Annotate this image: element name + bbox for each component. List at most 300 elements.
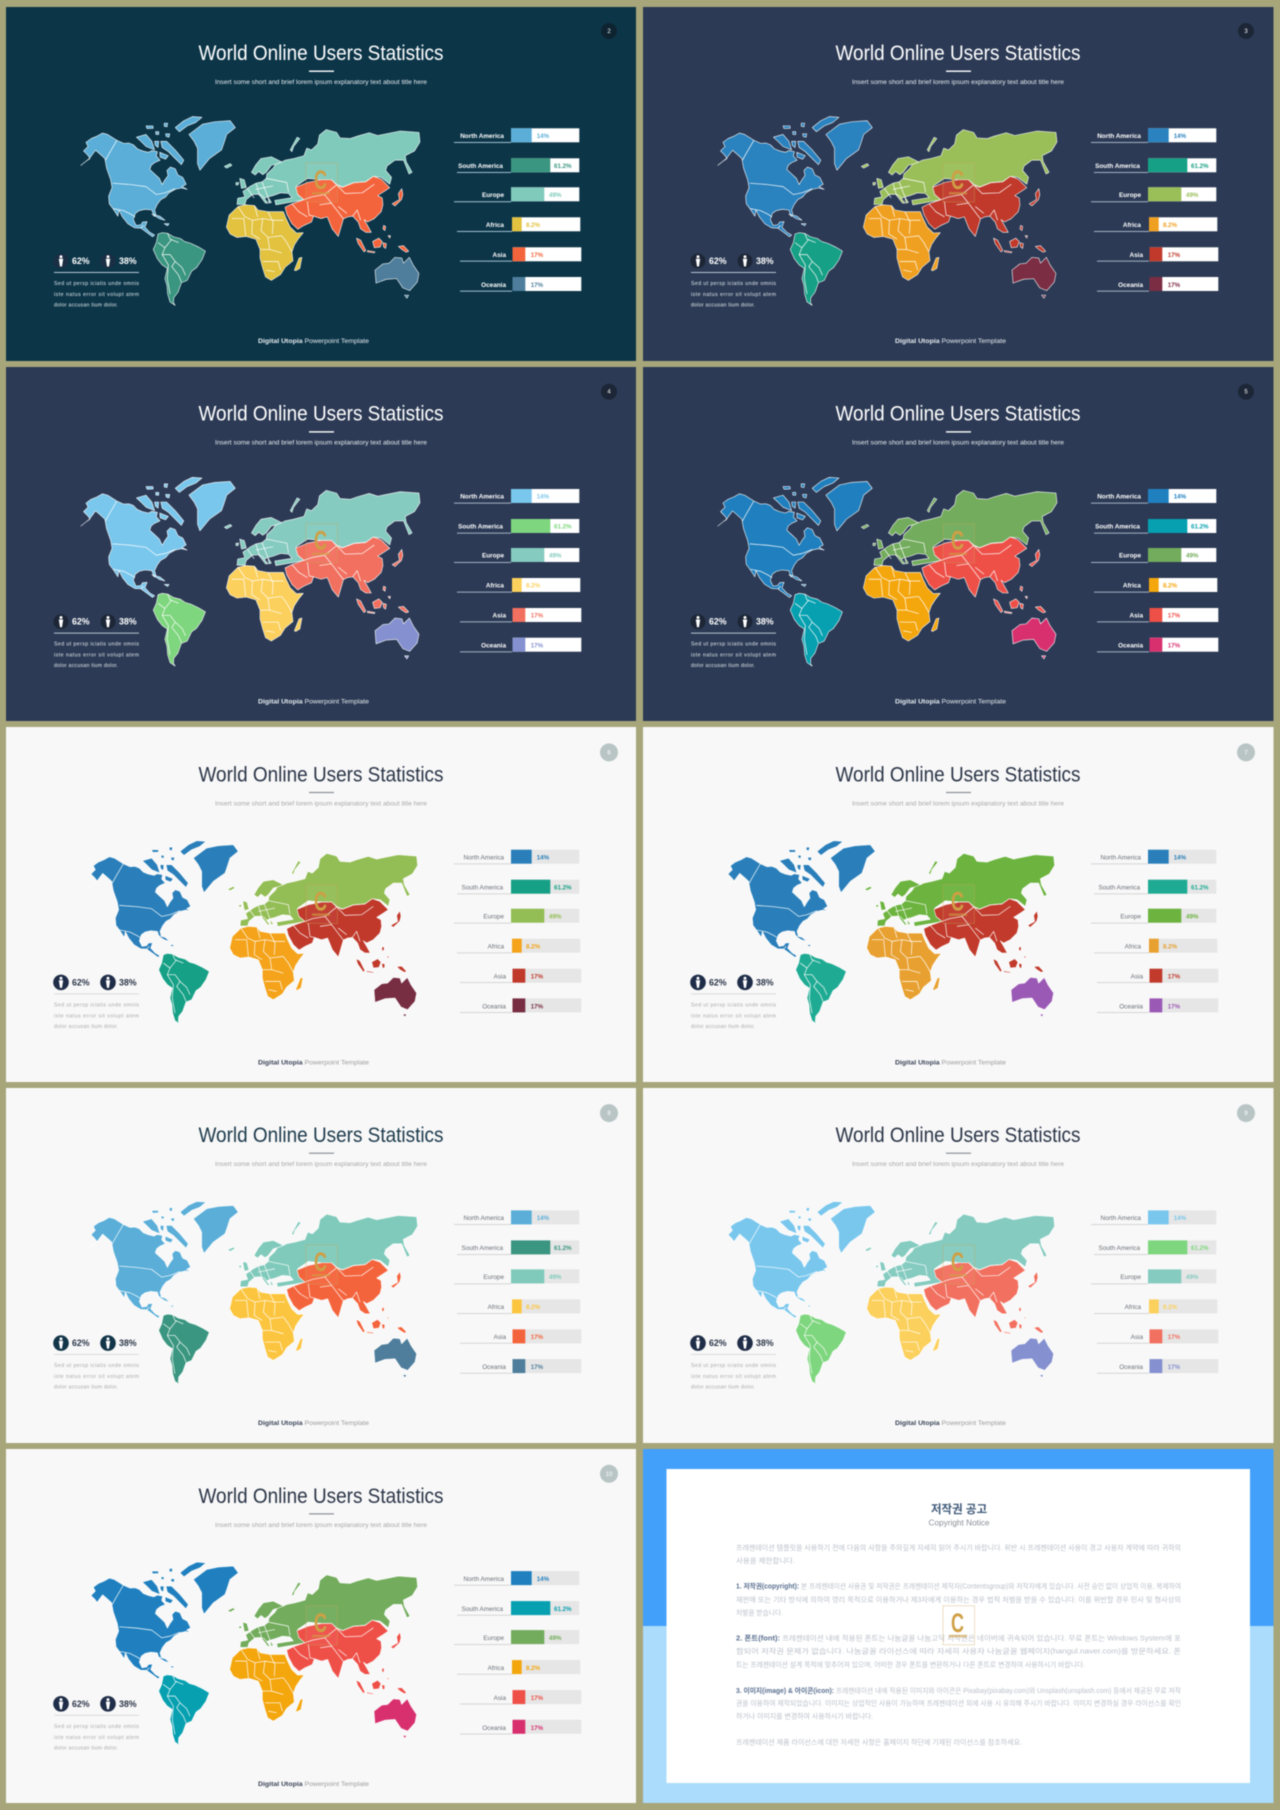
stats description: dolor accusan tium dolor. [691,663,755,669]
notice subheading: Copyright Notice [928,1518,990,1528]
notice intro [736,1543,1181,1565]
bar: North America: North America [464,1576,504,1583]
bar: Asia [460,247,581,262]
page number: 9 [1244,1111,1248,1117]
bar: Asia: Asia [494,1695,506,1702]
stats description: Sed ut persp iciatis unde omnis [54,642,139,648]
bar: Oceania [1097,277,1218,292]
bar: Asia: Asia [492,613,506,620]
gender stats: 62% [709,256,727,266]
bar: Oceania [1097,638,1218,652]
bar: Europe [454,909,579,924]
bar: Asia [460,1690,581,1704]
bar: North America: North America [1100,1215,1141,1222]
bar: South America [457,1601,579,1616]
bar: Europe: Europe [483,1274,504,1281]
bar: South America: South America [458,163,503,170]
bar: South America: South America [1095,163,1140,170]
world map [88,1201,418,1385]
bar: Asia: Asia [494,973,506,980]
title: World Online Users Statistics [198,763,444,786]
bar: Africa: Africa [486,583,504,590]
bar: Asia: Asia [1130,252,1143,259]
world map [81,117,420,305]
stats description: iste natus error sit volupt atem [691,653,776,659]
stats description: Sed ut persp iciatis unde omnis [691,1363,776,1369]
bar: Asia: Asia [494,1334,506,1341]
bar: Africa: 8.2% [526,1665,541,1672]
bar: South America: 61.2% [1191,163,1209,170]
notice section 1 [736,1582,1181,1617]
bar: North America [1091,1210,1216,1225]
world map [718,477,1057,666]
bar: North America [1091,489,1216,504]
title underline [946,70,971,72]
bar: Asia: Asia [492,252,506,259]
title: World Online Users Statistics [198,403,444,426]
bar: South America [1094,880,1216,894]
gender stats: 38% [756,977,774,987]
footer: Digital Utopia Powerpoint Template [895,1420,1006,1427]
gender stats: 38% [119,977,137,987]
bar: Africa: Africa [488,1665,504,1672]
bar: Europe: 49% [1186,553,1199,560]
stats description: dolor accusan tium dolor. [691,1024,755,1030]
notice heading: 저작권 공고 [931,1502,987,1516]
bar: Asia: 17% [1168,613,1181,620]
bar: North America: 14% [1174,494,1187,501]
page number: 10 [606,1472,613,1478]
stats description: iste natus error sit volupt atem [691,1374,776,1380]
notice section 3: 3. 이미지(image) & 아이콘(icon): 프레젠테이션 내에 적용된 이미지와 아이콘은 Pixabay(pixabay.com)와 Unsplash(unsplash.com) 등에서 제공된 무료 저작 [736,1686,1182,1695]
stats description: Sed ut persp iciatis unde omnis [54,1363,139,1369]
stats description: dolor accusan tium dolor. [691,302,755,308]
bar: Oceania: 17% [531,643,544,650]
footer: Digital Utopia Powerpoint Template [258,1420,369,1427]
bar: South America [1094,519,1216,534]
bar: Asia [1097,608,1218,622]
panel: slide 7 [643,727,1274,1082]
subtitle: Insert some short and brief lorem ipsum explanatory text about title here [215,1522,427,1529]
gender stats [54,614,137,629]
bar: Oceania: Oceania [482,1725,506,1732]
footer: Digital Utopia Powerpoint Template [258,1781,369,1788]
subtitle: Insert some short and brief lorem ipsum explanatory text about title here [852,800,1064,807]
page number [601,384,617,400]
title underline [309,1513,334,1514]
bar: North America [454,1571,579,1586]
gender stats: 38% [756,256,774,266]
bar: Europe: 49% [1186,192,1199,199]
bar: Oceania: 17% [531,282,544,289]
bar: Europe: Europe [1120,913,1141,920]
world map [725,841,1055,1024]
subtitle: Insert some short and brief lorem ipsum explanatory text about title here [852,1161,1064,1168]
bar: Asia: Asia [1131,973,1143,980]
bar: Oceania: Oceania [482,1003,506,1010]
bar: Europe: Europe [482,192,504,199]
notice closing: 프레젠테이션 제품 라이선스에 대한 자세한 사항은 홈페이지 하단에 기재된 라이선스를 참조하세요. [736,1738,1022,1747]
bar: Africa: 8.2% [526,943,541,950]
stats description [54,281,139,308]
bar: Africa [457,578,580,593]
bar: Africa: Africa [488,943,504,950]
stats divider [54,632,139,635]
bar: North America [1091,128,1216,143]
notice section 1: 처벌을 받습니다. [736,1608,783,1617]
bar: Africa: 8.2% [526,583,541,590]
stats divider [691,1353,776,1356]
watermark [943,163,974,202]
page number: 3 [1244,29,1248,35]
bar: Europe [454,548,579,563]
title underline [309,792,334,793]
bar: Africa: 8.2% [1163,1304,1178,1311]
bar: Oceania [460,998,581,1013]
watermark [943,524,974,563]
panel: slide 3 [643,7,1274,361]
stats divider [54,1714,139,1717]
gender stats: 38% [119,617,137,627]
title: World Online Users Statistics [198,42,444,65]
title underline [309,70,334,72]
stats divider [691,271,776,274]
bar: Oceania: Oceania [1118,643,1143,650]
gender stats: 38% [119,1338,137,1348]
footer: Digital Utopia Powerpoint Template [895,338,1006,345]
notice section 2: 2. 폰트(font): 프레젠테이션 내에 적용된 폰트는 나눔글꼴 나눔고딕 저작권은 네이버에 귀속되어 있습니다. 무료 폰트는 Windows System에 포 [736,1634,1182,1643]
world map [88,841,418,1024]
bar: North America [454,850,579,864]
title underline [309,431,334,433]
bar: Oceania: 17% [1168,1003,1181,1010]
stats divider [54,992,139,995]
page number: 8 [607,1111,611,1117]
title underline [309,1153,334,1154]
bar: Oceania: Oceania [1119,1003,1143,1010]
bar: South America: South America [461,1606,503,1613]
bar: Europe [1091,909,1216,924]
title: World Online Users Statistics [836,763,1080,786]
bar: North America: 14% [1174,1215,1187,1222]
bar: North America [454,489,579,504]
bar: Asia [1097,247,1218,262]
bar: Asia: Asia [1131,1334,1143,1341]
page number: 7 [1244,750,1248,756]
bar: Europe: 49% [549,1274,562,1281]
bar: South America: 61.2% [554,1245,572,1252]
bar: South America: 61.2% [1191,1245,1209,1252]
gender stats [690,975,774,990]
gender stats: 62% [72,1338,90,1348]
bar: Europe: Europe [1120,1274,1141,1281]
bar: South America: 61.2% [554,884,572,891]
bar: North America: North America [1097,133,1141,140]
title: World Online Users Statistics [836,1124,1080,1147]
page number [601,23,617,39]
gender stats [690,1335,774,1351]
bar: Asia: 17% [1168,252,1181,259]
stats description: dolor accusan tium dolor. [54,1024,118,1030]
stats description: Sed ut persp iciatis unde omnis [691,281,776,287]
watermark [943,884,974,923]
subtitle: Insert some short and brief lorem ipsum explanatory text about title here [852,79,1064,86]
bar: Europe: 49% [1186,913,1199,920]
stats description [54,1724,139,1751]
watermark [306,884,338,923]
bar: North America: 14% [537,1215,550,1222]
notice section 3: 하거나 이미지를 변경하여 사용하시기 바랍니다. [736,1712,873,1721]
bar: Africa [457,1660,580,1675]
bar: North America: North America [464,854,504,861]
bar: Oceania [460,277,581,292]
stats description [691,281,776,308]
world map [81,477,420,666]
stats description: iste natus error sit volupt atem [54,1374,139,1380]
bar: South America [457,519,579,534]
bar: Africa: Africa [488,1304,504,1311]
notice section 2 [736,1634,1182,1669]
notice background: upper blue [643,1449,1274,1626]
gender stats: 38% [756,1338,774,1348]
watermark [943,1245,974,1284]
gender stats [53,1335,137,1351]
gender stats [53,1696,137,1712]
bar: South America [457,1240,579,1255]
bar: North America: North America [1100,854,1141,861]
gender stats [690,254,774,268]
gender stats: 38% [756,617,774,627]
bar: South America: South America [461,884,503,891]
bar: Asia: 17% [531,973,544,980]
bar: South America: 61.2% [1191,884,1209,891]
stats description: iste natus error sit volupt atem [54,1013,139,1019]
bar: North America [454,1210,579,1225]
bar: Europe: Europe [1119,553,1141,560]
gender stats [690,614,774,629]
bar: Oceania [1097,1359,1218,1374]
gender stats: 62% [709,1338,727,1348]
bar: North America [1091,850,1216,864]
gender stats: 38% [119,1699,137,1709]
subtitle: Insert some short and brief lorem ipsum explanatory text about title here [215,1161,427,1168]
bar: Africa: 8.2% [526,1304,541,1311]
title: World Online Users Statistics [836,403,1080,426]
title underline [946,431,971,433]
panel: slide 4 [6,367,636,721]
footer: Digital Utopia Powerpoint Template [258,699,369,706]
stats divider [691,632,776,635]
world map [718,117,1057,305]
bar: Africa [1094,578,1217,593]
bar: Europe [454,1630,579,1645]
gender stats: 62% [72,256,90,266]
subtitle: Insert some short and brief lorem ipsum explanatory text about title here [215,800,427,807]
bar: Oceania: Oceania [481,643,506,650]
bar: South America: South America [461,1245,503,1252]
bar: Oceania [1097,998,1218,1013]
footer: Digital Utopia Powerpoint Template [895,1059,1006,1066]
bar: Oceania [460,1720,581,1734]
bar: South America: 61.2% [554,524,572,531]
page number: 4 [607,390,611,396]
bar: North America: North America [460,494,504,501]
bar: Africa: Africa [1125,1304,1141,1311]
panel: slide 8 [6,1088,636,1443]
stats description: dolor accusan tium dolor. [54,302,118,308]
bar: Africa: Africa [1123,583,1141,590]
bar: Asia [460,1329,581,1344]
bar: North America: North America [464,1215,504,1222]
stats description: iste natus error sit volupt atem [54,1735,139,1741]
bar: Europe [1091,548,1216,563]
bar: Oceania: 17% [1168,1364,1181,1371]
title: World Online Users Statistics [198,1485,444,1508]
bar: South America [1094,1240,1216,1255]
stats divider [54,1353,139,1356]
bar: Africa [1094,1299,1217,1314]
bar: South America: South America [1098,1245,1140,1252]
notice card [666,1469,1250,1783]
stats description: Sed ut persp iciatis unde omnis [691,1002,776,1008]
gender stats: 62% [72,977,90,987]
bar: Oceania [460,1359,581,1374]
bar: Europe [1091,187,1216,202]
bar: Asia: 17% [1168,1334,1181,1341]
bar: Europe: 49% [1186,1274,1199,1281]
stats description: Sed ut persp iciatis unde omnis [691,642,776,648]
bar: Asia: 17% [531,252,544,259]
page number [600,743,618,761]
bar: Africa [457,217,580,232]
bar: South America [457,158,579,173]
bar: Europe: 49% [549,553,562,560]
stats description [54,1363,139,1391]
stats description: iste natus error sit volupt atem [54,292,139,298]
page number [1237,1104,1255,1122]
bar: Asia [1097,969,1218,983]
bar: North America: 14% [1174,854,1187,861]
bar: Africa: 8.2% [1163,222,1178,229]
bar: North America: 14% [1174,133,1187,140]
title: World Online Users Statistics [836,42,1080,65]
page number [1237,743,1255,761]
bar: Asia: Asia [1130,613,1143,620]
subtitle: Insert some short and brief lorem ipsum explanatory text about title here [215,440,427,447]
page number [600,1465,618,1483]
bar: Asia [460,608,581,622]
stats description [54,642,139,669]
gender stats: 62% [709,977,727,987]
notice section 1: 재판매 또는 기타 방식에 의하여 영리 목적으로 이용하거나 제3자에게 이용하는 경우 법적 처벌을 받을 수 있습니다. 이를 위반할 경우 민사 및 형사상의 [736,1595,1181,1604]
page number: 2 [607,29,611,35]
title underline [946,792,971,793]
notice section 2: 함되어 저작권 문제가 없습니다. 나눔글꼴 라이선스에 따라 자세히 사용자 나눔글꼴 웹페이지(hangul.naver.com)를 방문하세요. 폰 [736,1647,1182,1656]
bar: South America [1094,158,1216,173]
bar: Europe: 49% [549,913,562,920]
bar: North America: 14% [537,133,550,140]
bar: Oceania: Oceania [482,1364,506,1371]
bar: Europe: 49% [549,1635,562,1642]
subtitle: Insert some short and brief lorem ipsum explanatory text about title here [215,79,427,86]
gender stats: 62% [72,617,90,627]
bar: Oceania [460,638,581,652]
gender stats: 62% [72,1699,90,1709]
bar: South America [457,880,579,894]
panel: slide 5 [643,367,1274,721]
stats description: Sed ut persp iciatis unde omnis [54,1002,139,1008]
bar: Europe: Europe [483,913,504,920]
bar: North America: 14% [537,854,550,861]
panel: slide 10 [6,1449,636,1803]
bar: Oceania: Oceania [481,282,506,289]
stats description: dolor accusan tium dolor. [54,1745,118,1751]
gender stats: 62% [709,617,727,627]
bar: Asia [1097,1329,1218,1344]
bar: Europe [454,187,579,202]
bar: Africa: 8.2% [1163,583,1178,590]
bar: North America [454,128,579,143]
bar: Oceania: Oceania [1118,282,1143,289]
bar: North America: 14% [537,1576,550,1583]
stats description: iste natus error sit volupt atem [54,653,139,659]
bar: Oceania: 17% [531,1364,544,1371]
bar: South America: 61.2% [554,1606,572,1613]
bar: Oceania: 17% [1168,643,1181,650]
notice background: lower light blue [643,1626,1274,1803]
bar: Africa: Africa [1125,943,1141,950]
bar: Africa: 8.2% [526,222,541,229]
bar: Europe: Europe [1119,192,1141,199]
stats description: iste natus error sit volupt atem [691,1013,776,1019]
bar: Oceania: Oceania [1119,1364,1143,1371]
bar: South America: 61.2% [554,163,572,170]
page number [1238,23,1254,39]
bar: Europe: Europe [482,553,504,560]
bar: Europe [454,1269,579,1284]
stats divider [691,992,776,995]
bar: Africa [1094,217,1217,232]
bar: South America: 61.2% [1191,524,1209,531]
stats description: dolor accusan tium dolor. [691,1385,755,1391]
bar: South America: South America [1098,884,1140,891]
stats description: dolor accusan tium dolor. [54,663,118,669]
panel: slide 6 [6,727,636,1082]
gender stats [54,254,137,268]
stats description [691,1363,776,1391]
world map [725,1201,1055,1385]
watermark [306,1606,338,1645]
bar: South America: South America [1095,524,1140,531]
gender stats [53,975,137,990]
stats description [54,1002,139,1030]
title underline [946,1153,971,1154]
panel: slide 9 [643,1088,1274,1443]
footer: Digital Utopia Powerpoint Template [258,1059,369,1066]
stats description: dolor accusan tium dolor. [54,1385,118,1391]
stats description [691,642,776,669]
page number: 6 [607,750,611,756]
title: World Online Users Statistics [198,1124,444,1147]
watermark [943,1606,974,1645]
bar: Africa [1094,939,1217,953]
footer: Digital Utopia Powerpoint Template [258,338,369,345]
panel: copyright notice [643,1449,1274,1803]
subtitle: Insert some short and brief lorem ipsum explanatory text about title here [852,440,1064,447]
bar: Africa: Africa [1123,222,1141,229]
notice section 2: 트는 프레젠테이션 설계 목적에 맞추어져 있으며, 어떠한 경우 폰트를 변환하거나 다른 폰트로 변경하여 사용하시기 바랍니다. [736,1660,1085,1669]
stats divider [54,271,139,274]
